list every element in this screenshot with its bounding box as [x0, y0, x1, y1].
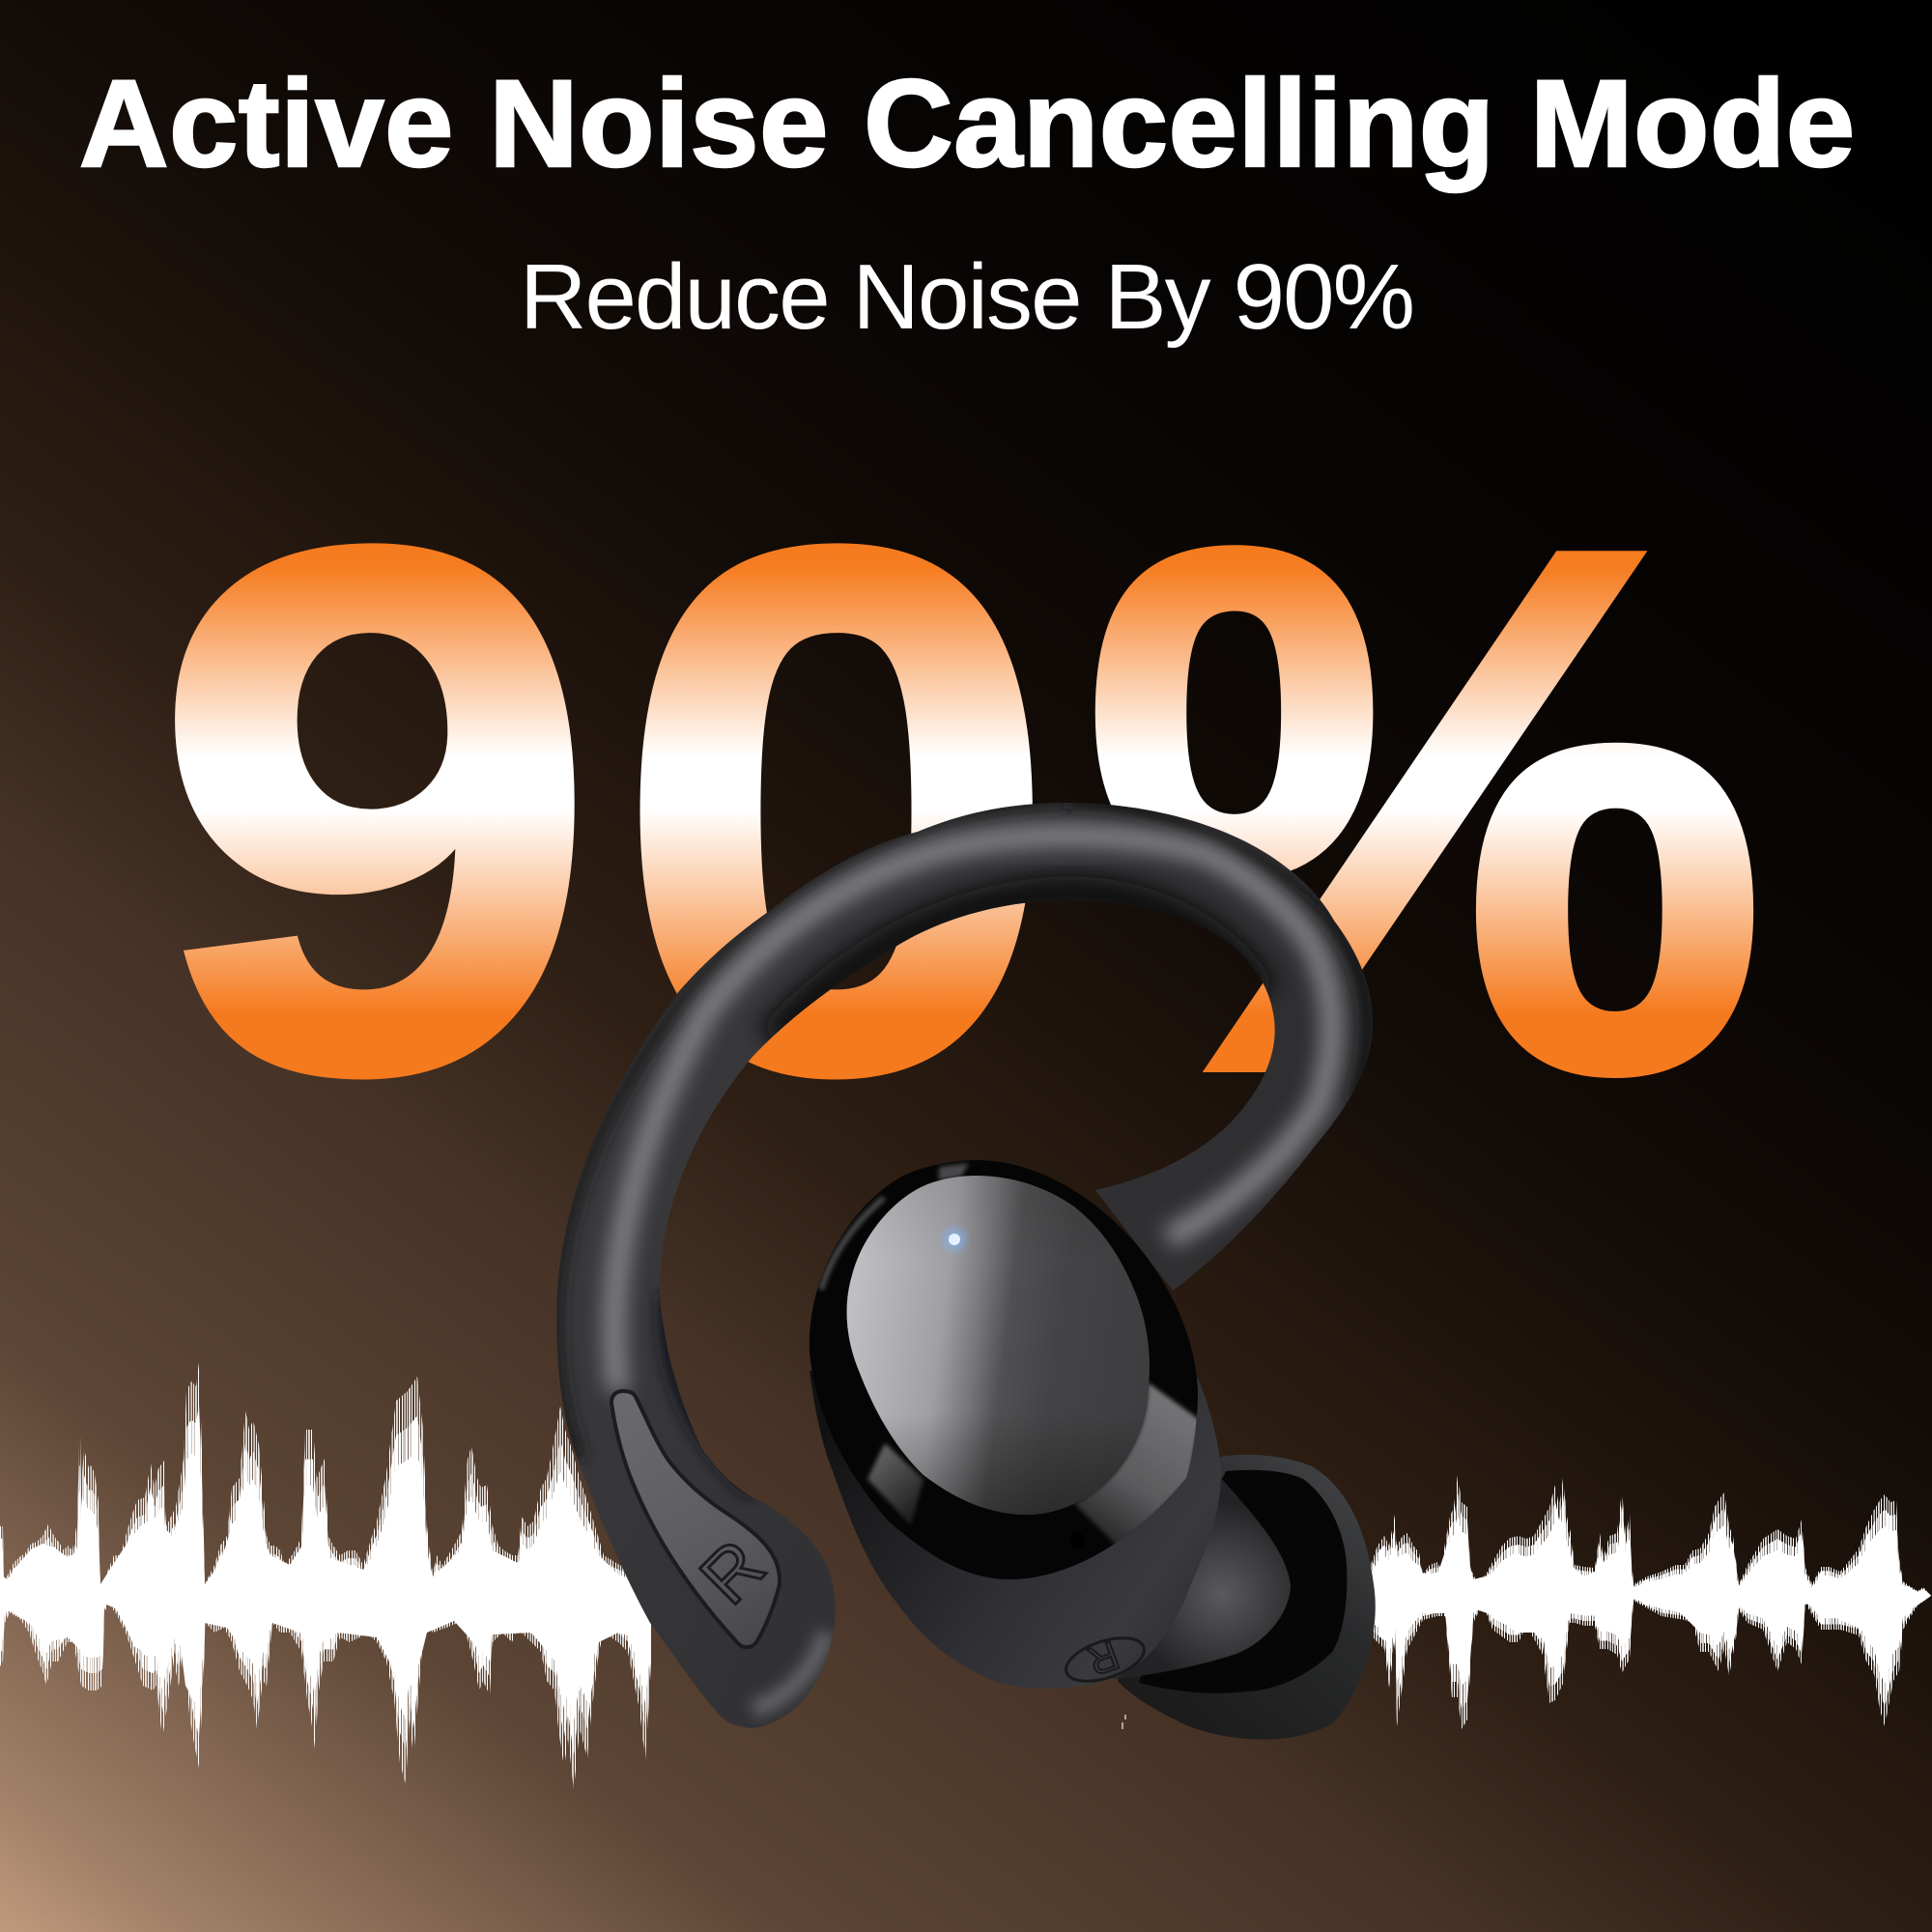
housing — [810, 1371, 1221, 1689]
earbud — [810, 1160, 1376, 1740]
sound waveform: left — [0, 1362, 651, 1790]
big number: 90%: % — [1081, 395, 1769, 1226]
bezel highlight: top — [939, 1163, 969, 1180]
face plate — [847, 1176, 1150, 1515]
nozzle — [1082, 1468, 1291, 1679]
eartip opening — [1139, 1470, 1347, 1693]
bezel highlight: left — [821, 1198, 884, 1290]
big number: 90% — [153, 394, 1769, 1226]
stray tick — [1122, 1715, 1125, 1729]
LED indicator — [943, 1228, 966, 1251]
sound waveform: right — [1122, 1475, 1931, 1729]
paddle panel — [611, 1391, 781, 1647]
title: Active Noise Cancelling Mode — [79, 55, 1855, 193]
logo: R badge: R — [1082, 1633, 1125, 1685]
bezel — [810, 1160, 1198, 1579]
logo: R mark: R — [685, 1524, 781, 1620]
earhook — [556, 803, 1373, 1728]
eartip — [1118, 1455, 1376, 1740]
mic hole — [1070, 1532, 1084, 1549]
big number: 90%: 90 — [153, 394, 1061, 1225]
bezel reflection: right — [1074, 1382, 1200, 1547]
logo: R badge — [1061, 1630, 1150, 1690]
bezel reflection: left — [867, 1443, 923, 1525]
subtitle: Reduce Noise By 90% — [520, 245, 1415, 349]
